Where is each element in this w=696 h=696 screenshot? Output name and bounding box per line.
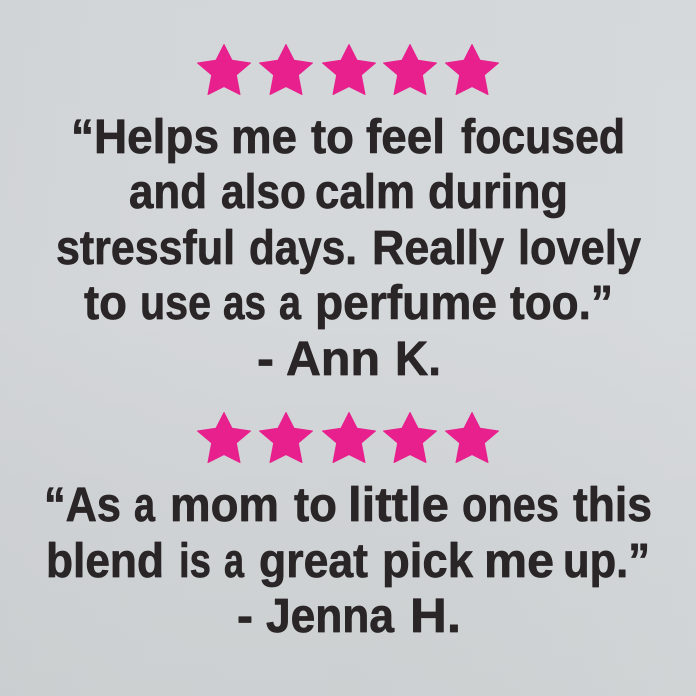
review 2 quote: great	[259, 535, 368, 588]
review 1 quote: lovely	[518, 222, 641, 275]
review 1 author	[257, 333, 441, 386]
review 2 quote: is	[179, 535, 211, 588]
review 2 quote: a	[224, 535, 244, 588]
review 2 quote	[44, 479, 652, 588]
review 1 rating stars	[198, 44, 498, 94]
review 1 quote: and	[129, 166, 207, 219]
review 2 quote: little	[348, 479, 449, 532]
review 2 quote: up.”	[563, 535, 650, 588]
review 1 author: -	[257, 333, 274, 386]
review 2 quote: “As	[44, 479, 121, 532]
review 2 quote: me	[484, 535, 554, 588]
review 2 quote: a	[134, 479, 155, 532]
review 2 author: Jenna	[266, 590, 394, 643]
review 1 quote: use	[140, 277, 211, 330]
review 1 quote: to	[311, 111, 354, 164]
review 2 quote: pick	[382, 535, 473, 588]
review 1 quote: focused	[461, 111, 625, 164]
review 1 quote: perfume	[315, 277, 497, 330]
review 1 quote: “Helps	[71, 111, 219, 164]
review 1 author: K.	[395, 333, 441, 386]
review 1 quote: during	[428, 166, 568, 219]
review 1 quote	[56, 111, 641, 330]
review 1 quote: too.”	[510, 277, 613, 330]
review 1 author: Ann	[286, 333, 380, 386]
review 2 rating stars	[198, 412, 498, 462]
review 2 author: H.	[410, 590, 461, 643]
review 2 quote: ones	[462, 479, 559, 532]
review 1 quote: a	[279, 277, 301, 330]
review 1 quote: as	[223, 277, 266, 330]
review 1 quote: days.	[249, 222, 357, 275]
review 2 author	[237, 590, 461, 643]
review 1 quote: calm	[315, 166, 415, 219]
review 2 quote: this	[573, 479, 652, 532]
review 2 quote: to	[294, 479, 337, 532]
review 1 quote: also	[221, 166, 306, 219]
review 2 author: -	[237, 590, 253, 643]
review 1 quote: Really	[372, 222, 504, 275]
review 2 quote: blend	[46, 535, 164, 588]
review 1 quote: me	[231, 111, 297, 164]
review 2 quote: mom	[170, 479, 279, 532]
review 1 quote: to	[84, 277, 127, 330]
review 1 quote: stressful	[56, 222, 235, 275]
review 1 quote: feel	[366, 111, 445, 164]
